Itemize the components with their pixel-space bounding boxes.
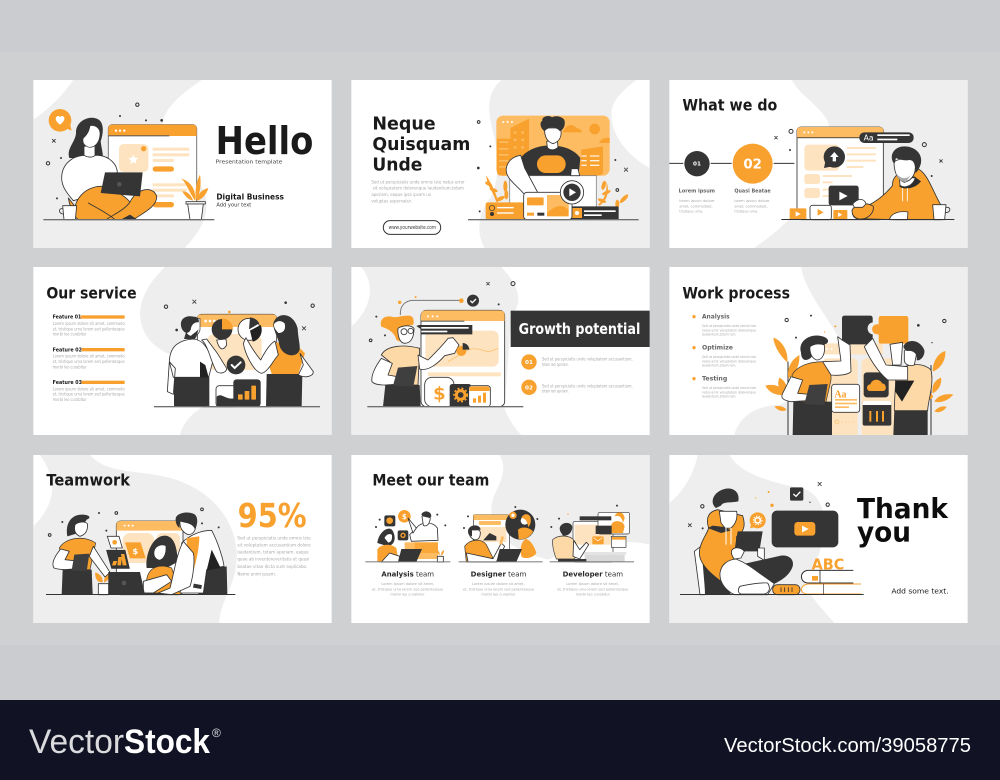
scene base line 3 [550, 560, 634, 563]
decorative dots [775, 129, 942, 177]
chart card [469, 386, 490, 407]
title [857, 492, 949, 548]
step: optimize: Sed ut perspiciatis unde omnis iste [702, 355, 756, 359]
scene: developer team [550, 505, 630, 562]
title [372, 114, 470, 176]
feature 03: Lorem ipsum dolore sit amet, commodo [53, 386, 125, 391]
baseline [43, 219, 214, 220]
label bubble [416, 325, 472, 334]
dots row [835, 420, 854, 424]
baseline [154, 406, 320, 407]
feature 02: Lorem ipsum dolore sit amet, commodo [53, 354, 125, 359]
icon: play button [560, 181, 584, 204]
step: optimize [692, 345, 756, 368]
pie chart right [238, 317, 262, 342]
step: testing [692, 376, 756, 399]
subtitle: Presentation template [216, 160, 283, 166]
body text: sit voluptatem dolorenque laudantium,totam [373, 186, 464, 191]
pie icon [456, 343, 469, 356]
browser window [116, 521, 183, 595]
feature 03: morbi leo curabitur [53, 397, 87, 402]
scene: analysis team: $ [402, 513, 407, 521]
monitor stand [510, 176, 596, 220]
team text 2: et, tristique urna lorem sed pellentesque [463, 587, 535, 591]
team text 3: et, tristique urna lorem sed pellentesque [557, 587, 629, 591]
city scene [496, 116, 610, 176]
ui cards [486, 192, 619, 220]
timeline: 01 [693, 162, 701, 168]
step 2 text [734, 188, 771, 214]
big stat: 95% [238, 496, 307, 535]
timeline [669, 144, 794, 184]
step: optimize: Optimize [702, 345, 733, 352]
baseline [468, 219, 639, 220]
baseline [367, 406, 523, 407]
panel: thank you slide [669, 455, 968, 623]
decorative dots [369, 282, 515, 342]
browser window [421, 310, 505, 407]
type bar [859, 132, 914, 143]
feature 03 [53, 380, 125, 402]
baseline [781, 218, 954, 221]
shoe [773, 585, 800, 595]
man in hoodie [852, 146, 941, 220]
footer logo: ® [212, 726, 221, 740]
section caption: Add your text [216, 203, 251, 209]
background blob [491, 455, 650, 560]
body text: Sed ut perspiciatis unde omnis iste natus error [371, 179, 465, 184]
step 1 text: Lorem ipsum [679, 188, 715, 194]
icon: heart speech bubble [49, 109, 72, 132]
right plant [926, 351, 953, 435]
dollar card: $ [433, 383, 446, 404]
video player [772, 511, 838, 547]
step 2 text: Quasi Beatae [734, 188, 771, 194]
background blob [754, 80, 968, 248]
title: Thank [857, 492, 949, 525]
step: optimize: natus error voluptatem doloremque [702, 359, 756, 363]
decorative dots [48, 508, 220, 536]
puzzle dark [842, 316, 873, 344]
decorative dots [477, 121, 628, 212]
team text 1: Lorem ipsum dolore sit amet, [381, 582, 434, 586]
title: Unde [372, 155, 422, 176]
title: Quisquam [372, 134, 470, 155]
pie chart left [212, 318, 233, 349]
body text: aperiam, eaque ipsa ipsam un [371, 192, 432, 197]
team text 2: Lorem ipsum dolore sit amet, [472, 582, 525, 586]
right man [158, 513, 227, 595]
coffee cup [933, 205, 950, 220]
team text 3: Lorem ipsum dolore sit amet, [566, 582, 619, 586]
panel: work process slide [669, 267, 968, 435]
title: What we do [682, 96, 778, 115]
item 02: 02 [525, 385, 533, 391]
body text: Nemo enim ipsam. [237, 571, 276, 576]
image card [216, 386, 237, 407]
panel: what we do slide [669, 80, 968, 248]
dashboard window [197, 314, 277, 407]
card: type: Aa [834, 389, 847, 400]
puzzle orange [872, 316, 908, 344]
team label 1: Analysis team [381, 571, 434, 579]
step: analysis: Analysis [702, 314, 730, 321]
seated man [694, 488, 793, 595]
team label 2: Designer team [471, 571, 526, 579]
timeline: 02 [743, 157, 762, 172]
step: testing: Testing [702, 376, 727, 383]
footer logo: Stock [124, 723, 210, 761]
body text: beatae vitae dicta sunt explicabo. [237, 564, 307, 569]
title: Hello [216, 119, 313, 163]
check badge [227, 356, 245, 374]
team text 3: morbi leo curabitur [576, 593, 610, 597]
item 01: Sed ut perspiciatis unde voluptatem accusantium, [542, 357, 633, 362]
step 1 text: lorem ipsum dolore [679, 199, 715, 203]
item 02: Sed ut perspiciatis unde voluptatem accusantium, [542, 383, 633, 388]
body text [371, 179, 465, 203]
woman [243, 315, 313, 407]
feature 02 [53, 347, 125, 369]
background blob [140, 267, 332, 435]
step: analysis [692, 314, 756, 337]
background blob [351, 267, 521, 435]
man [167, 316, 227, 407]
footer logo [29, 723, 221, 761]
feature 02: Feature 02 [53, 347, 83, 353]
seated woman [143, 536, 182, 595]
title banner [511, 311, 650, 347]
step: testing: laudantium,totam rem. [702, 395, 736, 399]
bar chart card [233, 379, 261, 407]
footer url: VectorStock.com/39058775 [724, 735, 971, 757]
step: optimize: laudantium,totam rem. [702, 364, 736, 368]
step: testing: Sed ut perspiciatis unde omnis iste [702, 386, 756, 390]
card: type [832, 384, 860, 412]
woman [782, 335, 851, 435]
title: Neque [372, 114, 436, 135]
body text: Sed ut perspiciatis unde omnis iste [237, 536, 311, 541]
item 01: 01 [525, 360, 533, 366]
gear card [450, 384, 471, 407]
feature 02: et, tristique urna lorem sed pellentesque [53, 359, 125, 364]
woman with laptop [62, 118, 157, 220]
item 01: totam rem aperiam. [542, 362, 569, 367]
dollar card [425, 377, 454, 407]
decorative dots [164, 300, 314, 331]
pale columns [823, 343, 896, 435]
background blob [669, 455, 834, 623]
body text: quae ab inventoreveritatis et quasi [237, 557, 309, 562]
step: analysis: Sed ut perspiciatis unde omnis iste [702, 324, 756, 328]
feature 01: Lorem ipsum dolore sit amet, commodo [53, 321, 125, 326]
decorative dots [785, 315, 946, 343]
team text 3 [557, 582, 629, 597]
panel: teamwork slide [33, 455, 332, 623]
scene base line 2 [459, 560, 543, 563]
scene base line 1 [365, 560, 450, 563]
section heading: Digital Business [216, 193, 284, 202]
man [864, 338, 932, 435]
item 02: totam rem aperiam. [542, 389, 569, 394]
browser window [797, 127, 883, 220]
title: Teamwork [46, 471, 131, 490]
scene: analysis team [375, 510, 446, 562]
step: analysis: laudantium,totam rem. [702, 333, 736, 337]
icon: money note [125, 542, 146, 558]
left woman [53, 515, 110, 595]
feature 01: Feature 01 [53, 315, 82, 321]
coffee cup [59, 206, 77, 220]
step 1 text: amet, commodoet, [679, 204, 713, 208]
team text 2: morbi leo curabitur [481, 593, 516, 597]
feature 03: Feature 03 [53, 380, 83, 386]
panel: our service slide [33, 267, 332, 435]
background blob [33, 80, 207, 248]
footer logo: Vector [29, 723, 124, 761]
decorative dots [46, 103, 163, 199]
body text [237, 536, 311, 576]
website pill: www.yourwebsite.com [389, 225, 436, 231]
step: analysis: natus error voluptatem doloremque [702, 328, 756, 332]
body text: sit voluptatem accusantium dolore [237, 543, 311, 548]
background blob [734, 267, 968, 435]
body text: laudantium, totam aperiam, eaque [237, 550, 309, 555]
step 2 text: amet, commodoet, [734, 204, 768, 208]
baseline [680, 594, 864, 595]
chart cards [107, 536, 129, 568]
books [801, 570, 861, 594]
card: cloud [864, 372, 889, 397]
feature 01: morbi leo curabitur [53, 332, 87, 337]
feature 03: et, tristique urna lorem sed pellentesque [53, 392, 125, 397]
decorative dots [688, 482, 829, 529]
baseline [46, 594, 235, 595]
footer bar [0, 700, 1000, 780]
feature 01: et, tristique urna lorem sed pellentesque [53, 326, 125, 331]
icon: upload bubble [824, 146, 845, 168]
step 2 text: lorem ipsum dolore [734, 199, 770, 203]
leaves [484, 175, 629, 208]
team text 1: morbi leo curabitur [390, 593, 425, 597]
left plant [765, 338, 799, 435]
connector with check [400, 295, 479, 315]
title: Work process [682, 283, 790, 302]
man [506, 116, 580, 205]
background blob [33, 455, 237, 623]
feature 01 [53, 315, 125, 337]
woman presenter [372, 316, 459, 407]
item 01 [521, 354, 633, 370]
potted plant [181, 175, 208, 220]
step 1 text [679, 188, 715, 214]
scene: designer team [463, 506, 538, 562]
feature 02: morbi leo curabitur [53, 364, 87, 369]
step 2 text: tristique urna. [734, 210, 758, 214]
title: you [857, 515, 911, 548]
card: bars [863, 401, 891, 426]
laptop [108, 572, 163, 595]
item 02 [521, 380, 633, 395]
icon: gear bubble [750, 512, 766, 528]
body text: voluptas aspernatur. [371, 198, 412, 203]
icon: check box [790, 487, 803, 501]
icon: money note: $ [132, 546, 138, 556]
background blob [479, 80, 650, 248]
website pill [383, 221, 441, 234]
browser window [108, 125, 197, 220]
panel: growth potential slide [351, 267, 650, 435]
abc label: ABC [812, 557, 844, 574]
icon: video card [829, 186, 866, 207]
closing text: Add some text. [891, 587, 949, 595]
team text 1: et, tristique urna lorem sed pellentesque [372, 587, 444, 591]
title: Our service [46, 283, 137, 302]
team text 1 [372, 582, 444, 597]
small video cards [790, 205, 847, 220]
step 1 text: tristique urna. [679, 210, 703, 214]
panel: meet our team slide [351, 455, 650, 623]
title: Meet our team [372, 471, 489, 490]
team text 2 [463, 582, 535, 597]
title banner: Growth potential [519, 320, 640, 338]
team label 3: Developer team [563, 571, 623, 579]
type bar: Aa [864, 133, 874, 142]
panel: neque quisquam slide [351, 80, 650, 248]
plant [95, 572, 110, 595]
panel: hello slide [33, 80, 332, 248]
step: testing: natus error voluptatem doloremque [702, 390, 756, 394]
